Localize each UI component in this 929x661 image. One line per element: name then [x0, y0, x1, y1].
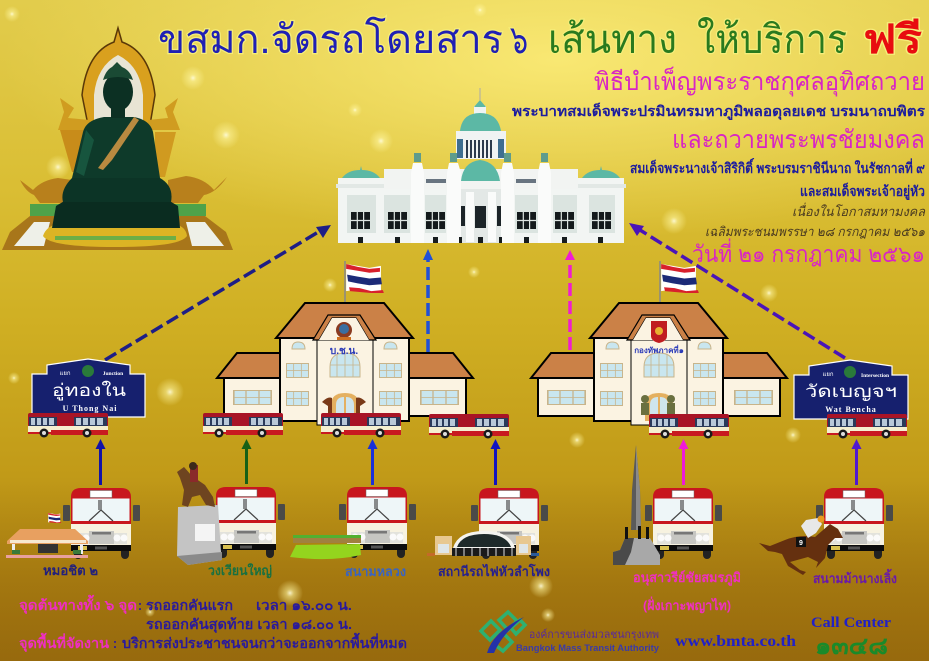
icon: King Taksin monument [177, 462, 222, 565]
road sign: Wat Bencha: วัดเบญจฯ [805, 382, 897, 401]
call center: ๑๓๔๘ [815, 633, 888, 660]
call center [811, 615, 891, 660]
website: www.bmta.co.th [675, 633, 796, 650]
road sign: Wat Bencha: Wat Bencha [825, 405, 877, 414]
seated figure [52, 200, 180, 228]
labels: route origin names: สนามหลวง [345, 564, 406, 579]
dome [474, 106, 486, 116]
call center: Call Center [811, 615, 891, 631]
road sign: Wat Bencha: แยก [822, 372, 834, 378]
title: ๖ [510, 18, 528, 62]
panel: army area building: กองทัพภาคที่๑ [634, 344, 684, 355]
icon: Sanam Luang lawn [290, 535, 361, 559]
text block: service times: : [113, 635, 117, 651]
icons: side-view buses [28, 413, 907, 438]
arrow: blue dashed to palace [423, 249, 433, 352]
title: ให้บริการ [697, 16, 847, 62]
text block: service times: รถออกคันสุดท้าย เวลา ๑๘.๐๐ น. [146, 616, 352, 633]
labels: route origin names: วงเวียนใหญ่ [208, 562, 272, 579]
logo: BMTA: Bangkok Mass Transit Authority [516, 643, 659, 653]
road sign: U Thong Nai: Junction [103, 371, 123, 377]
labels: route origin names [43, 562, 897, 614]
arrow: purple dashed to palace [629, 223, 845, 358]
arrows: buses upward [96, 439, 862, 485]
road sign: Wat Bencha [794, 360, 908, 419]
panel: Ananta Samakhom palace [336, 88, 626, 243]
title: เส้นทาง [548, 18, 677, 62]
side naga ornaments [58, 98, 90, 130]
labels: route origin names: อนุสาวรีย์ชัยสมรภูมิ [633, 570, 741, 586]
logo: BMTA [481, 612, 659, 653]
text block: service times: จุดต้นทางทั้ง ๖ จุด [19, 594, 137, 614]
panel: army area building [531, 261, 787, 425]
icon: racehorse and jockey: 9 [799, 540, 803, 547]
road sign: U Thong Nai: อู่ทองใน [52, 380, 126, 401]
panel: BMTA headquarters building: บ.ช.น. [330, 346, 358, 357]
arrow: magenta dashed to palace [565, 250, 575, 350]
text block: ceremony details: เนื่องในโอกาสมหามงคล [792, 202, 926, 219]
elephants [20, 178, 72, 203]
text block: service times: จุดพื้นที่จัดงาน [19, 632, 109, 652]
icon: Mo Chit 2 terminal [6, 513, 88, 558]
text block: ceremony details: พระบาทสมเด็จพระปรมินทรมหาภูมิพลอดุลยเดช บรมนาถบพิตร [512, 102, 926, 120]
icon: Victory Monument [613, 445, 660, 565]
text block: service times: เวลา ๑๖.๐๐ น. [256, 597, 352, 613]
throne arch [82, 28, 155, 125]
side domes [342, 166, 380, 178]
icon: racehorse and jockey [759, 516, 843, 575]
road sign: U Thong Nai: U Thong Nai [63, 404, 117, 413]
panel: BMTA headquarters building [217, 261, 473, 425]
towers [411, 163, 424, 243]
text block: service times [19, 594, 407, 652]
road sign: U Thong Nai: แยก [59, 371, 71, 377]
labels: route origin names: หมอชิต ๒ [43, 563, 98, 578]
arrow: navy dashed to palace [105, 225, 331, 360]
title [158, 16, 923, 62]
text block: service times: : [138, 597, 142, 613]
title: ฟรี [863, 18, 923, 62]
logo: BMTA: องค์การขนส่งมวลชนกรุงเทพ [529, 628, 659, 641]
text block: service times: บริการส่งประชาชนจนกว่าจะออกจากพื้นที่หมด [122, 632, 407, 651]
icons: front-view buses [63, 487, 893, 559]
icon: Hua Lamphong station [427, 531, 539, 556]
portico [461, 189, 501, 243]
road sign: U Thong Nai [32, 359, 145, 417]
window panels [347, 195, 615, 233]
title: ขสมก.จัดรถโดยสาร [158, 17, 503, 62]
labels: route origin names: (ฝั่งเกาะพญาไท) [643, 596, 731, 614]
labels: route origin names: สนามม้านางเลิ้ง [813, 568, 897, 586]
main block [338, 178, 624, 243]
text block: ceremony details [512, 66, 926, 267]
road sign: Wat Bencha: Intersection [861, 373, 889, 379]
front dome [461, 160, 500, 181]
icon: jade Buddha statue [2, 28, 233, 250]
labels: route origin names: สถานีรถไฟหัวลำโพง [438, 563, 550, 579]
text block: service times: รถออกคันแรก [146, 597, 233, 613]
